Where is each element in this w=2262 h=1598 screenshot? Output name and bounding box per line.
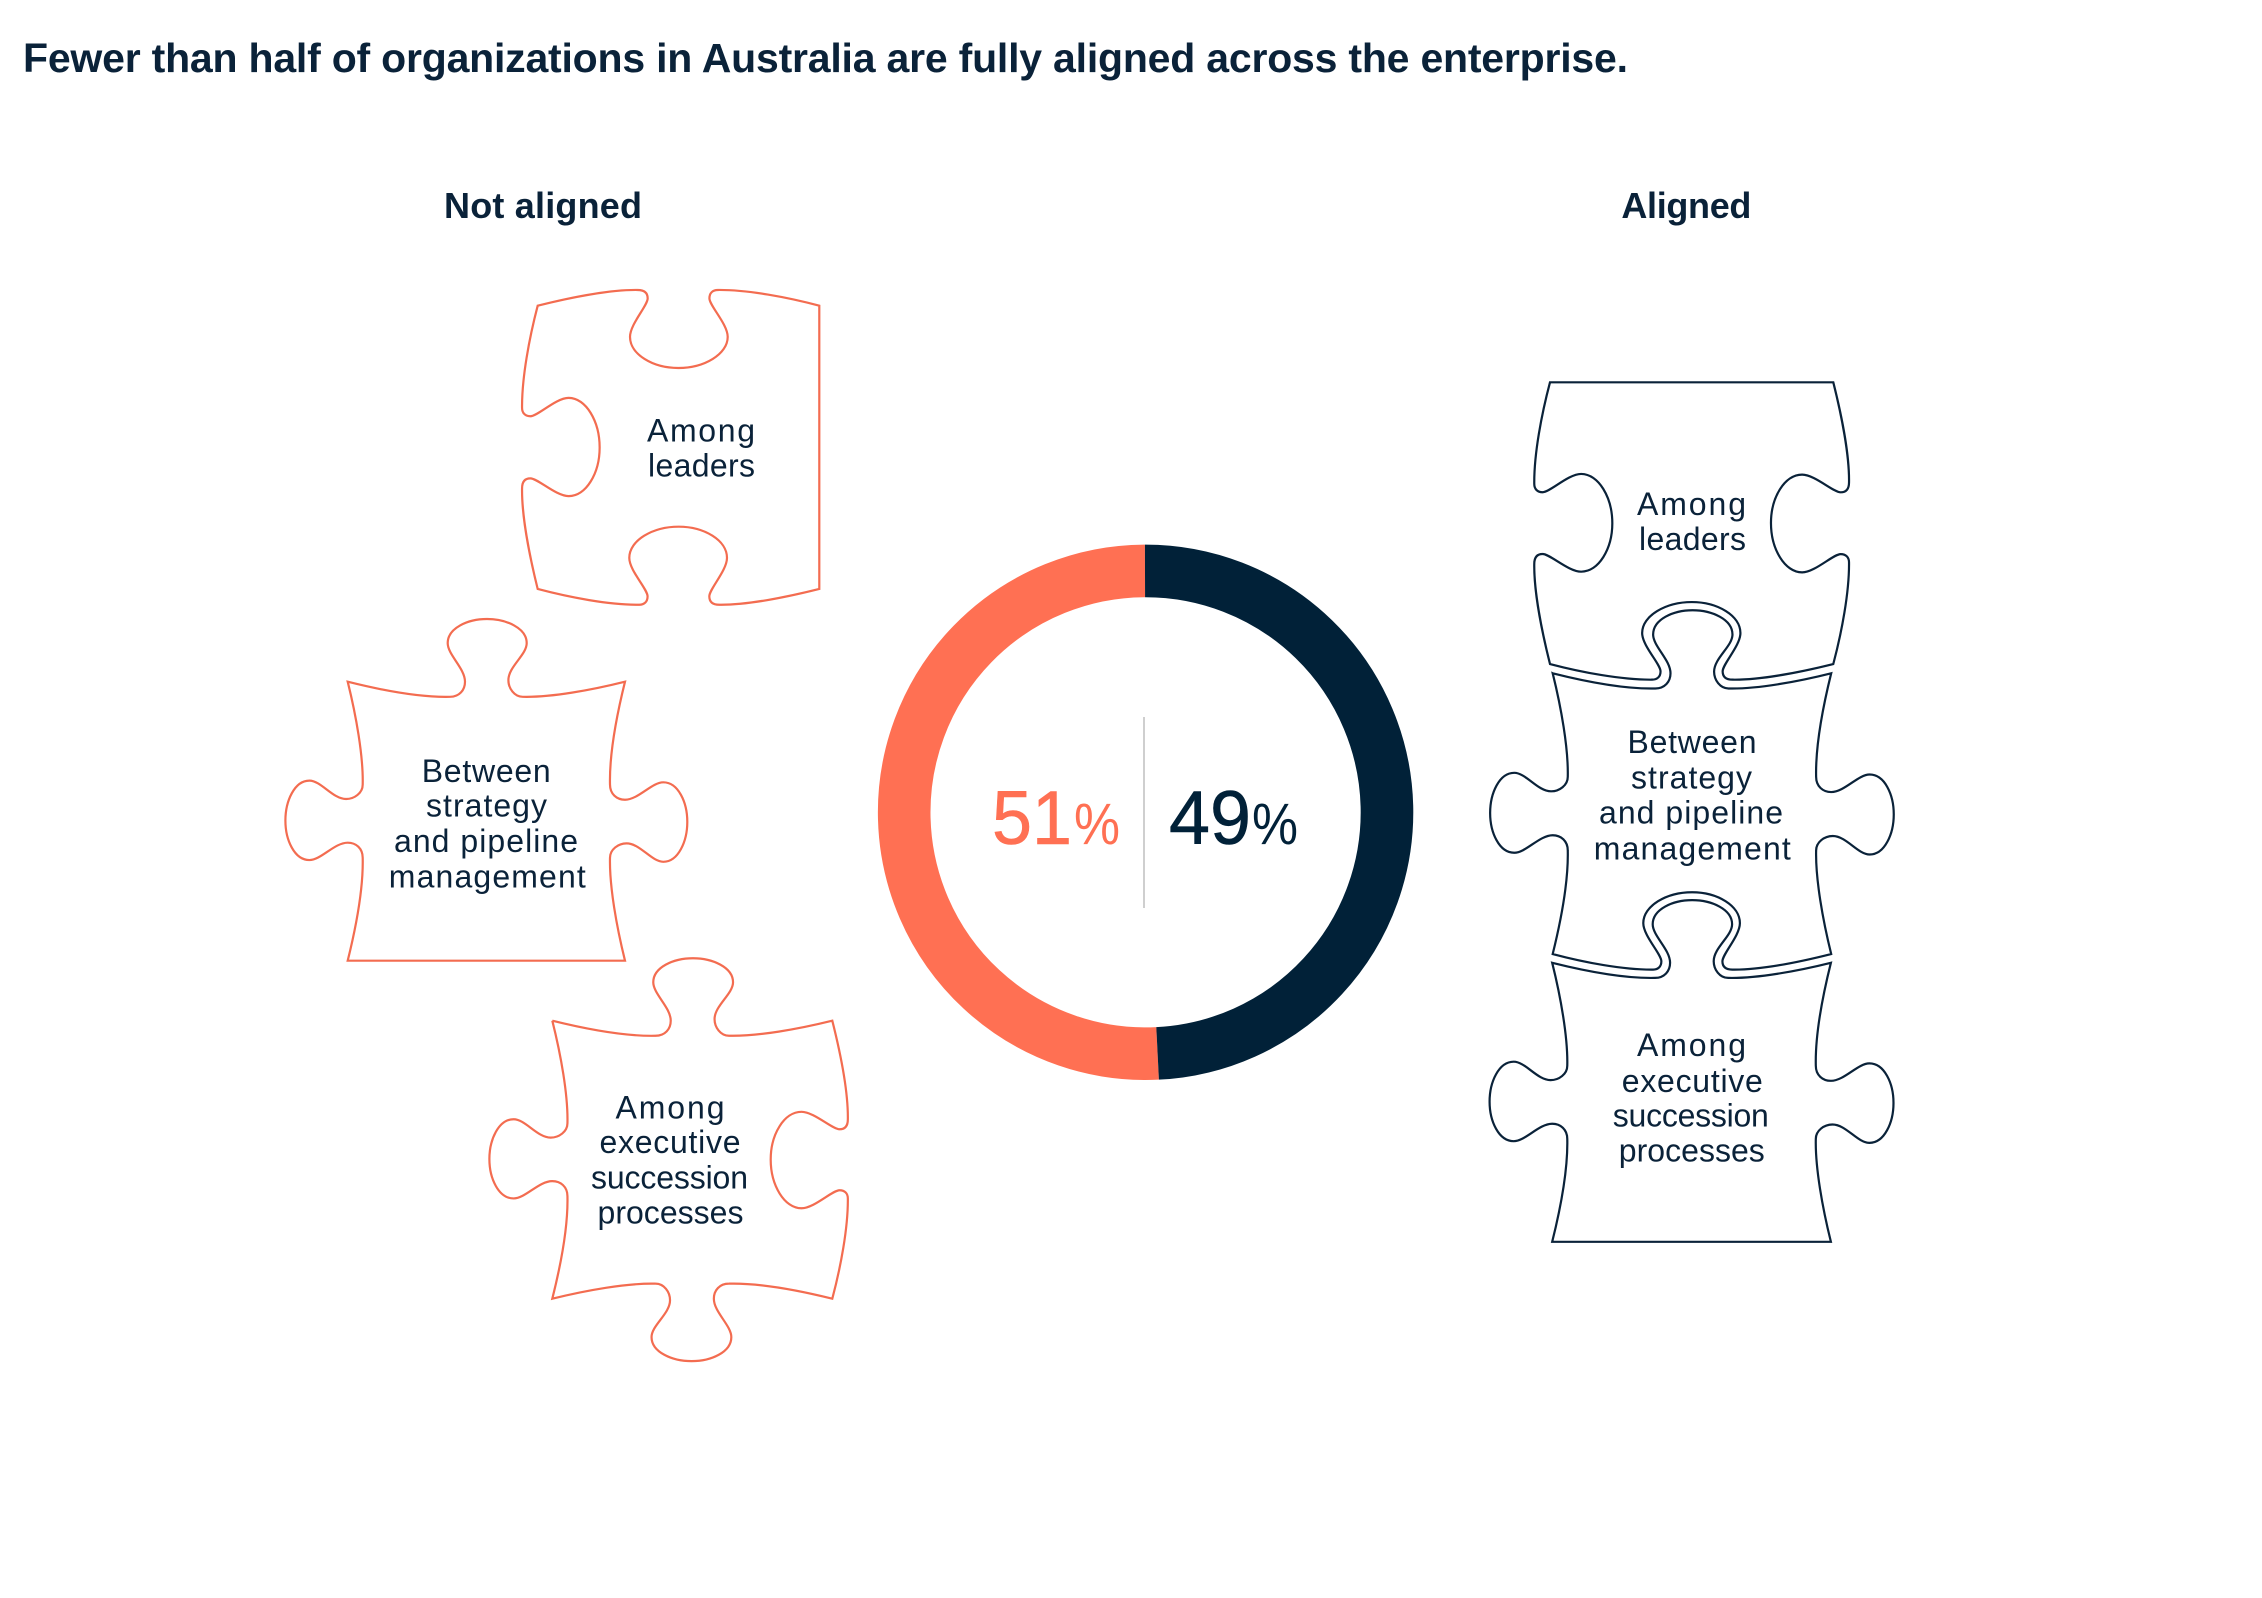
center divider — [1143, 717, 1145, 908]
puzzle piece: aligned among leaders — [1534, 382, 1849, 680]
value: 49 percent — [1169, 776, 1298, 861]
puzzle piece: aligned among leaders: leaders — [1639, 521, 1746, 557]
puzzle piece: not aligned among executive succession processes: executive — [600, 1124, 740, 1160]
title: Fewer than half of organizations in Australia are fully aligned across the enterprise. — [23, 35, 1628, 81]
puzzle piece: not aligned among executive succession processes: Among — [616, 1090, 724, 1126]
puzzle piece: not aligned among leaders: Among — [647, 413, 755, 449]
puzzle piece: not aligned among executive succession processes: processes — [598, 1194, 744, 1230]
value: 51 percent: 51 — [992, 776, 1072, 861]
puzzle piece: aligned between strategy and pipeline management: management — [1594, 830, 1791, 866]
puzzle piece: not aligned among leaders — [522, 290, 819, 605]
heading: not aligned: Not aligned — [444, 185, 642, 226]
value: 49 percent: % — [1252, 792, 1298, 857]
puzzle piece: not aligned among executive succession processes: succession — [591, 1159, 748, 1195]
puzzle piece: aligned among executive succession processes — [1490, 900, 1893, 1242]
puzzle piece: aligned among leaders: Among — [1637, 486, 1746, 522]
donut chart: 51% not aligned, 49% aligned — [904, 571, 1387, 1054]
value: 49 percent: 49 — [1169, 776, 1251, 861]
puzzle piece: aligned between strategy and pipeline management: Between — [1628, 724, 1756, 760]
puzzle piece: not aligned between strategy and pipeline management: and pipeline — [394, 823, 578, 859]
donut segment: 49% aligned — [1145, 571, 1387, 1053]
puzzle piece: not aligned among executive succession processes — [489, 958, 848, 1361]
panel: aligned — [1490, 185, 1894, 1242]
puzzle piece: aligned among executive succession processes: Among — [1637, 1027, 1746, 1063]
puzzle piece: aligned between strategy and pipeline management: strategy — [1631, 759, 1752, 795]
puzzle piece: aligned between strategy and pipeline management — [1490, 610, 1894, 970]
puzzle piece: not aligned between strategy and pipeline management: management — [389, 858, 586, 894]
puzzle piece: not aligned between strategy and pipeline management: strategy — [426, 787, 547, 823]
puzzle piece: not aligned among leaders: leaders — [648, 448, 755, 484]
value: 51 percent: % — [1074, 792, 1120, 857]
puzzle piece: aligned among executive succession processes: succession — [1613, 1098, 1769, 1134]
panel: not aligned — [285, 185, 848, 1361]
donut segment: 51% not aligned — [904, 571, 1158, 1054]
puzzle piece: aligned among executive succession processes: processes — [1619, 1133, 1765, 1169]
puzzle piece: not aligned between strategy and pipeline management: Between — [422, 753, 551, 789]
puzzle piece: aligned between strategy and pipeline management: and pipeline — [1599, 794, 1783, 830]
value: 51 percent — [992, 776, 1120, 861]
heading: aligned: Aligned — [1621, 185, 1751, 226]
puzzle piece: aligned among executive succession processes: executive — [1622, 1063, 1763, 1099]
puzzle piece: not aligned between strategy and pipeline management — [285, 619, 687, 961]
